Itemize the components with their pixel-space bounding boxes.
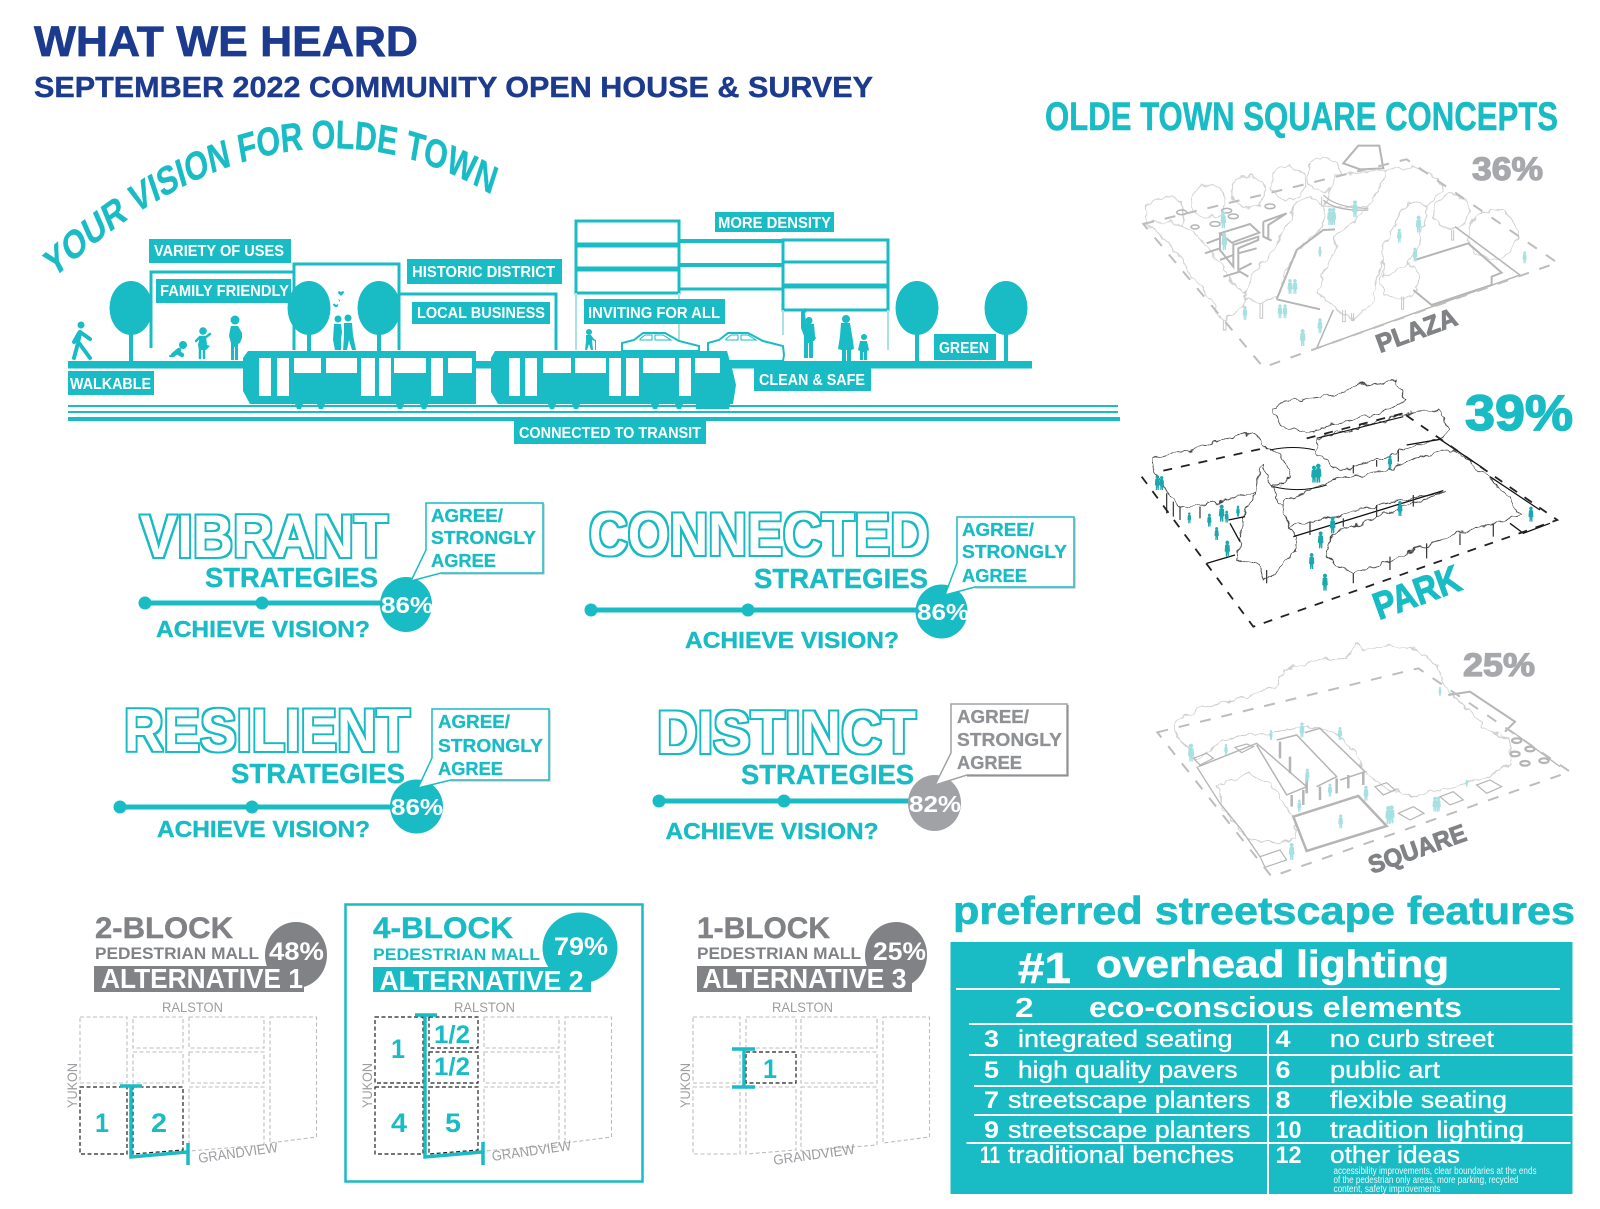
ranks 3 to 12: high quality pavers [1018, 1057, 1238, 1084]
person: business traveller waving [801, 308, 816, 358]
callout: AGREE/ [438, 711, 510, 732]
park drawing [1142, 380, 1557, 627]
label: green [934, 334, 996, 360]
street grid: 1 [763, 1054, 777, 1084]
subheading: strategies: STRATEGIES [205, 562, 378, 593]
panel: plaza concept [1143, 146, 1557, 367]
label: square: SQUARE [1365, 819, 1470, 880]
ranks 3 to 12: 3 [984, 1026, 999, 1053]
street grid: GRANDVIEW [491, 1137, 573, 1164]
panel: vibrant strategies [138, 503, 544, 642]
label: local business: LOCAL BUSINESS [417, 305, 545, 322]
percent circle: 25: 25% [873, 938, 926, 966]
label: more density: MORE DENSITY [718, 215, 831, 232]
word: vibrant: VIBRANT [140, 503, 388, 570]
subheading: strategies: STRATEGIES [231, 758, 405, 789]
rank 1 [1018, 944, 1449, 993]
ranks 3 to 12: streetscape planters [1008, 1117, 1250, 1144]
heading: 2-block: 2-BLOCK [95, 912, 234, 945]
label: historic district: HISTORIC DISTRICT [412, 264, 555, 281]
label: green: GREEN [939, 340, 989, 357]
ranks 3 to 12: integrated seating [1018, 1026, 1232, 1053]
street grid: 4 [391, 1108, 407, 1138]
street grid: YUKON [359, 1063, 375, 1108]
canopy outlines [1173, 643, 1512, 797]
callout: AGREE/ [962, 519, 1034, 540]
percent circle [916, 584, 969, 638]
scale line [138, 596, 385, 610]
street grid [64, 1000, 316, 1166]
label: connected to transit [514, 421, 706, 444]
callout: AGREE [438, 758, 503, 779]
label: walkable: WALKABLE [70, 376, 151, 393]
word: distinct: DISTINCT [657, 699, 916, 766]
callout: AGREE/ [431, 505, 503, 526]
panel: square concept [1157, 643, 1570, 880]
heading: 1-block: 1-BLOCK [697, 912, 831, 945]
street grid: RALSTON [162, 1000, 223, 1015]
ranks 3 to 12: 10 [1276, 1117, 1302, 1144]
heading: preferred streetscape features: preferred streetscape features [953, 890, 1575, 933]
banner: alternative 1: ALTERNATIVE 1 [101, 963, 303, 994]
ranks 3 to 12 [980, 1026, 1524, 1169]
ranks 3 to 12: no curb street [1330, 1026, 1494, 1053]
label: connected to transit: CONNECTED TO TRANSIT [519, 425, 701, 442]
street grid: 2 [151, 1108, 167, 1138]
tram right [491, 351, 736, 409]
percent circle: 82% [909, 791, 961, 817]
ranks 3 to 12: public art [1330, 1057, 1440, 1084]
panel: connected strategies [584, 501, 1075, 653]
street grid: YUKON [677, 1063, 693, 1108]
rank 2: 2 [1015, 992, 1034, 1023]
label: plaza: PLAZA [1372, 302, 1461, 359]
percent circle: 86% [917, 599, 969, 625]
people [74, 291, 869, 362]
label: family friendly [156, 279, 291, 303]
panel: distinct strategies [652, 699, 1068, 844]
label: clean and safe: CLEAN & SAFE [759, 372, 865, 389]
percent circle [380, 577, 433, 632]
callout: AGREE [431, 550, 496, 571]
panel: alternative 3, 1-block [677, 912, 930, 1168]
callout: AGREE/ [957, 706, 1029, 727]
question: ACHIEVE VISION? [685, 627, 899, 653]
percent circle [908, 775, 961, 831]
label: inviting for all [584, 299, 725, 324]
percent circle: 86% [381, 592, 433, 618]
canopy outlines [1273, 380, 1405, 432]
heading: 4-block: 4-BLOCK [373, 912, 514, 945]
title: WHAT WE HEARD [34, 18, 418, 66]
percent: 25: 25% [1463, 647, 1535, 683]
callout [945, 517, 1075, 595]
ranks 3 to 12: 4 [1276, 1026, 1291, 1053]
callout: STRONGLY [962, 541, 1068, 562]
label: family friendly: FAMILY FRIENDLY [160, 283, 289, 300]
ranks 3 to 12: streetscape planters [1008, 1087, 1250, 1114]
percent circle: 25 [865, 922, 927, 988]
person: pregnant woman [229, 316, 242, 360]
callout: AGREE [957, 752, 1022, 773]
percent circle: 48 [265, 922, 327, 988]
rank 1: #1 [1018, 944, 1071, 993]
label: park: PARK [1368, 558, 1467, 628]
heading: your vision for olde town (curved): YOUR VISION FOR OLDE TOWN [42, 120, 498, 274]
word: resilient: RESILIENT [124, 697, 410, 764]
street grid [359, 1000, 612, 1165]
cars [622, 333, 784, 361]
buildings [151, 221, 888, 350]
ranks 3 to 12: flexible seating [1330, 1087, 1507, 1114]
panel: streetscape features ranking [950, 942, 1572, 1195]
scale line [114, 800, 395, 814]
other ideas note: accessibility improvements, clear boundaries at the ends [1334, 1166, 1536, 1177]
canopy outlines [1145, 196, 1185, 234]
street grid: GRANDVIEW [197, 1139, 279, 1166]
question: ACHIEVE VISION? [157, 816, 370, 842]
percent: 36: 36% [1472, 151, 1543, 187]
subtitle: SEPTEMBER 2022 COMMUNITY OPEN HOUSE & SURVEY [34, 72, 873, 104]
panel: alternative 1, 2-block [64, 912, 327, 1166]
scale line [584, 604, 921, 616]
subheading: pedestrian mall: PEDESTRIAN MALL [697, 944, 861, 963]
banner: alternative 3: ALTERNATIVE 3 [702, 963, 906, 994]
rank 2: eco-conscious elements [1089, 992, 1462, 1024]
scale line [652, 794, 914, 808]
percent circle: 79 [542, 912, 618, 984]
trees [110, 281, 1028, 362]
ranks 3 to 12: traditional benches [1008, 1142, 1234, 1169]
subheading: strategies: STRATEGIES [741, 759, 914, 790]
ranks 3 to 12: 5 [984, 1057, 999, 1084]
label: variety of uses [149, 239, 291, 263]
ranks 3 to 12: 6 [1276, 1057, 1290, 1084]
street grid: RALSTON [454, 1000, 515, 1015]
person: child [196, 327, 210, 358]
other ideas note: of the pedestrian only areas, more parking, recycled [1334, 1175, 1518, 1186]
percent: 39: 39% [1465, 385, 1573, 441]
ranks 3 to 12: 11 [980, 1142, 1000, 1169]
square drawing [1157, 643, 1570, 877]
panel background [950, 942, 1572, 1194]
street grid [677, 1000, 930, 1168]
question: ACHIEVE VISION? [666, 818, 878, 844]
other ideas note [1334, 1166, 1536, 1195]
street grid: RALSTON [772, 1000, 833, 1015]
label: variety of uses: VARIETY OF USES [154, 243, 284, 260]
subheading: strategies: STRATEGIES [754, 563, 928, 594]
rank 1: overhead lighting [1096, 944, 1449, 986]
person: elder with cane [585, 329, 596, 350]
panel: park concept [1142, 380, 1573, 628]
panel: resilient strategies [114, 697, 550, 842]
callout [411, 503, 544, 581]
street grid: 1/2 [434, 1053, 470, 1081]
callout: AGREE [962, 565, 1027, 586]
callout: STRONGLY [957, 729, 1063, 750]
label: walkable [68, 371, 154, 395]
callout [935, 704, 1068, 785]
person: baby [170, 341, 187, 356]
panel: alternative 2, 4-block [346, 904, 642, 1182]
highlight box [346, 904, 642, 1182]
subheading: pedestrian mall: PEDESTRIAN MALL [373, 945, 540, 964]
callout [418, 709, 550, 788]
callout: STRONGLY [438, 735, 544, 756]
word: connected: CONNECTED [589, 501, 929, 568]
people: couple and hearts [333, 291, 356, 350]
people: mother and child [838, 315, 869, 362]
label: historic district [407, 259, 562, 284]
label: clean and safe [754, 367, 871, 391]
street grid: 1/2 [434, 1021, 470, 1049]
labels [68, 212, 996, 444]
divider lines [956, 988, 1572, 1194]
other ideas note: content, safety improvements [1334, 1184, 1440, 1195]
ranks 3 to 12: other ideas [1330, 1142, 1460, 1169]
street grid: 5 [445, 1108, 461, 1138]
callout: STRONGLY [431, 527, 537, 548]
ranks 3 to 12: 12 [1276, 1142, 1302, 1169]
ranks 3 to 12: tradition lighting [1330, 1117, 1524, 1144]
ranks 3 to 12: 7 [984, 1087, 999, 1114]
subheading: pedestrian mall: PEDESTRIAN MALL [95, 944, 259, 963]
panel: street scene vision [68, 212, 1120, 444]
street grid: GRANDVIEW [772, 1141, 856, 1168]
street grid: 1 [391, 1034, 405, 1064]
percent circle [390, 780, 443, 834]
banner: alternative 2: ALTERNATIVE 2 [380, 965, 584, 996]
percent circle: 86% [391, 794, 443, 820]
plaza drawing [1143, 146, 1557, 367]
street grid: 1 [95, 1108, 109, 1138]
question: ACHIEVE VISION? [156, 616, 370, 642]
sidewalk and tracks [68, 361, 1120, 421]
label: inviting for all: INVITING FOR ALL [588, 305, 720, 322]
percent circle: 48: 48% [269, 938, 324, 966]
person: walker [74, 322, 90, 358]
ranks 3 to 12: 8 [1276, 1087, 1290, 1114]
street grid: YUKON [64, 1063, 80, 1108]
tram left [243, 351, 476, 409]
ranks 3 to 12: 9 [984, 1117, 999, 1144]
percent circle: 79: 79% [554, 933, 608, 961]
